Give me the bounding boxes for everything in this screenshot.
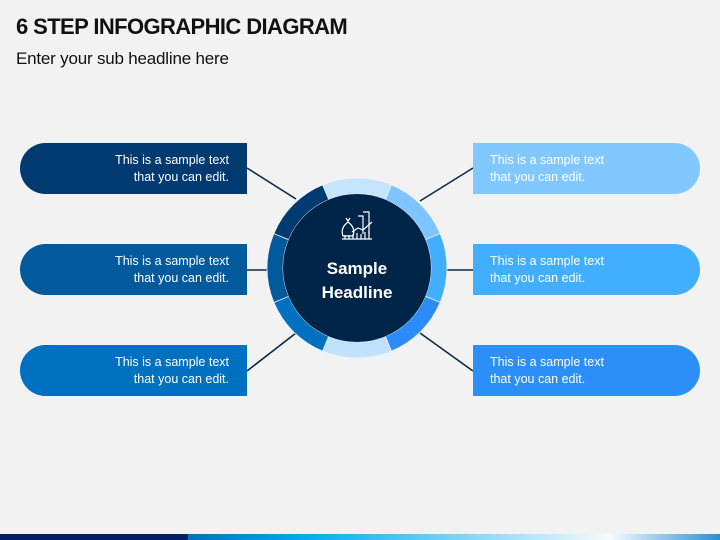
box: left 3: This is a sample text [115, 354, 229, 368]
box: right 3: This is a sample text [490, 354, 604, 368]
box: left 2: This is a sample text [115, 254, 229, 268]
box: left 3 [20, 345, 247, 396]
box: right 2 [473, 244, 700, 295]
bottom bar [0, 534, 720, 540]
box: left 1: This is a sample text [115, 152, 229, 166]
box: left 1 [20, 143, 247, 194]
box: right 3 [473, 345, 700, 396]
box: right 2: This is a sample text [490, 254, 604, 268]
central ring diagram: Headline [322, 283, 392, 302]
box: left 2 [20, 244, 247, 295]
title: 6 STEP INFOGRAPHIC DIAGRAM [16, 14, 347, 39]
box: right 3: that you can edit. [490, 372, 585, 386]
icon: money bag and chart [342, 212, 372, 239]
center headline: Sample [327, 259, 387, 278]
box: left 2: that you can edit. [134, 270, 229, 284]
box: right 1: This is a sample text [490, 152, 604, 166]
center circle [283, 194, 431, 342]
box: right 1 [473, 143, 700, 194]
box: right 2: that you can edit. [490, 270, 585, 284]
subtitle: Enter your sub headline here [16, 49, 229, 68]
box: left 1: that you can edit. [134, 170, 229, 184]
box: right 1: that you can edit. [490, 170, 585, 184]
box: left 3: that you can edit. [134, 372, 229, 386]
